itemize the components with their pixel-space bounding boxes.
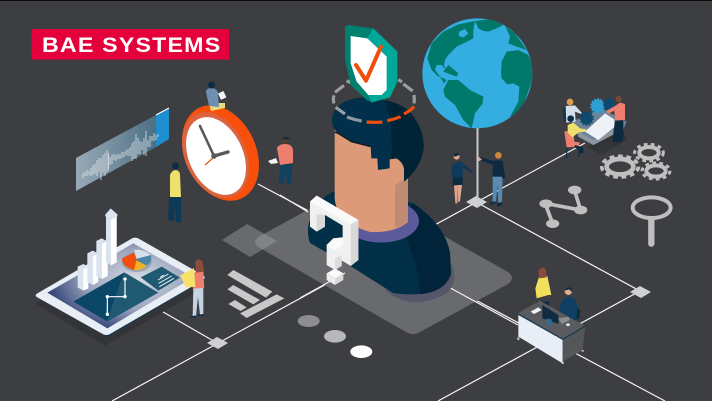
gears icon — [602, 144, 670, 179]
office desk with two people — [517, 268, 585, 364]
clock — [167, 93, 274, 213]
person sitting on clock — [206, 82, 226, 111]
sound wave panel — [76, 108, 169, 191]
globe on pole — [422, 18, 535, 202]
stacked bars icon — [227, 270, 284, 318]
team table with gears — [563, 96, 627, 158]
tablet with charts — [35, 208, 207, 346]
base plate under head — [255, 187, 512, 334]
person in yellow shirt — [168, 162, 181, 222]
woman beside globe — [452, 153, 473, 203]
connector lines — [112, 143, 665, 401]
dashed ring around head — [333, 80, 414, 122]
dots sequence — [298, 315, 372, 358]
small floor diamond — [222, 224, 277, 257]
man holding globe pole — [478, 152, 505, 207]
junction diamonds — [207, 196, 651, 349]
bust figure with head — [308, 97, 454, 302]
shield with check mark — [345, 25, 397, 102]
woman holding yellow paper — [180, 259, 204, 318]
magnifying glass icon — [633, 197, 671, 244]
logo: BAE Systems: BAE SYSTEMS — [42, 33, 220, 57]
node path icon — [539, 186, 587, 228]
question mark — [310, 196, 358, 285]
person in salmon shirt — [268, 137, 293, 184]
connector lines over plate — [280, 195, 518, 325]
